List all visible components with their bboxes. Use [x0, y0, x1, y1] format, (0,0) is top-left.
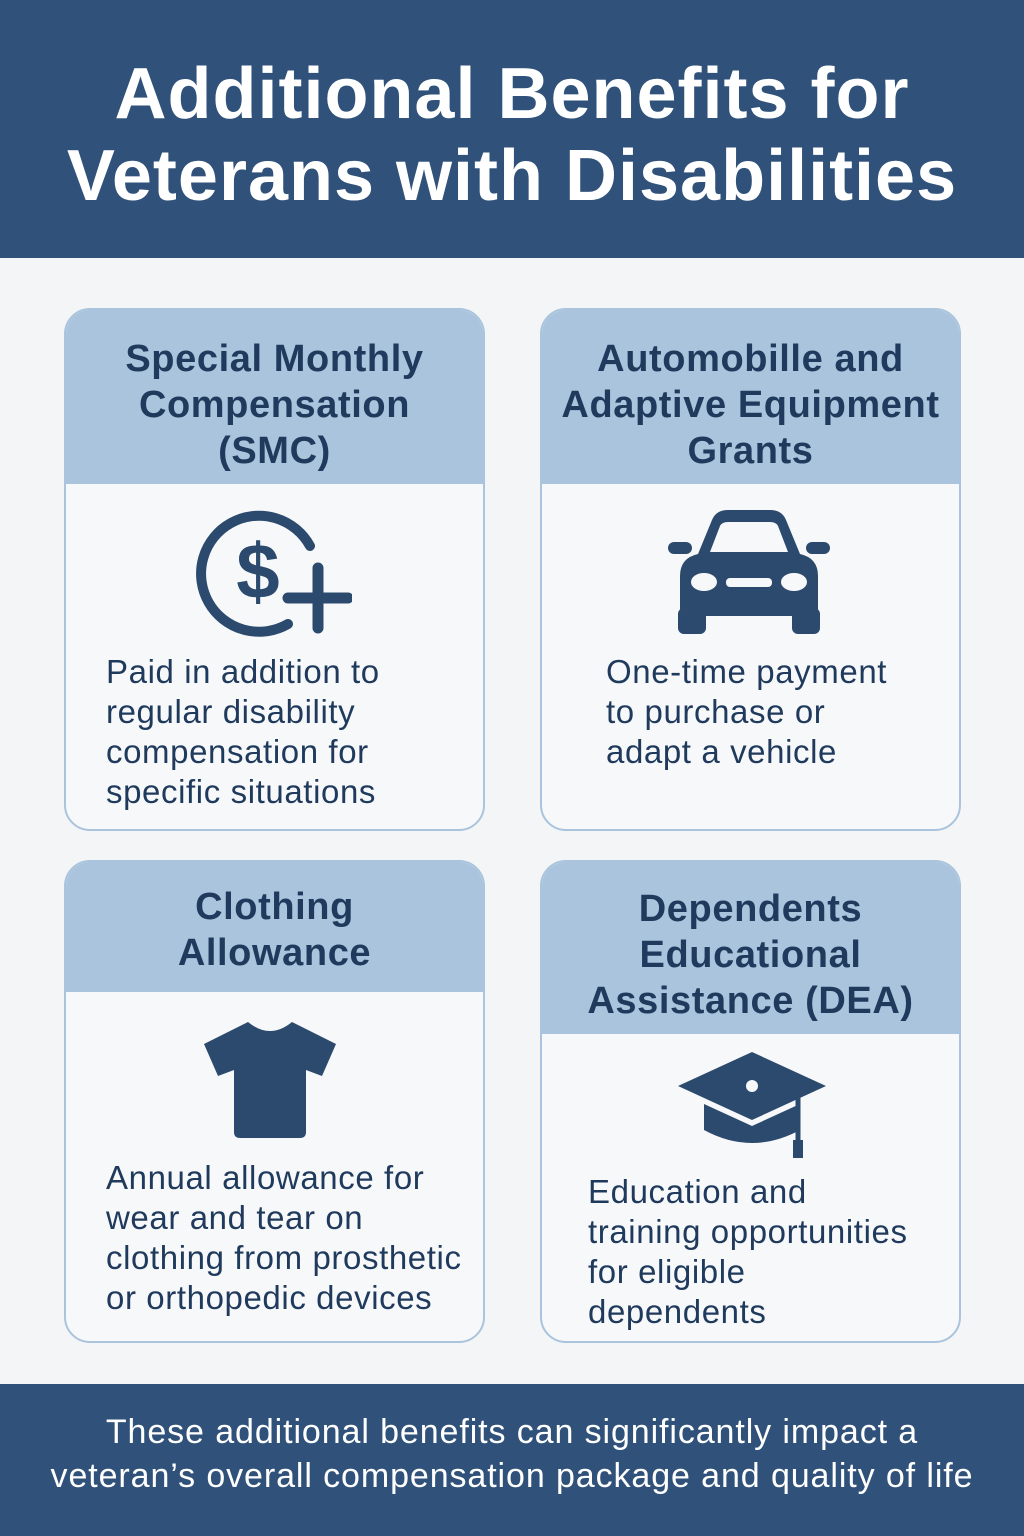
text: Automobile description: [606, 653, 887, 770]
heading: Automobile: [542, 310, 959, 484]
heading: DEA: Assistance (DEA): [587, 980, 914, 1022]
text: DEA description: Education and: [588, 1173, 807, 1210]
text: SMC description: specific situations: [106, 773, 376, 810]
heading: Automobile: Automobille and: [597, 338, 904, 380]
text: Clothing description: or orthopedic devices: [106, 1279, 432, 1316]
text: DEA description: [588, 1173, 908, 1330]
text: Clothing description: [106, 1159, 462, 1316]
text: Automobile description: One-time payment: [606, 653, 887, 690]
heading: DEA: [542, 862, 959, 1034]
heading: Clothing: [66, 862, 483, 992]
heading: SMC: (SMC): [218, 430, 331, 472]
panel: Clothing: [64, 860, 485, 1343]
heading: Automobile: Grants: [687, 430, 814, 472]
heading: SMC: Special Monthly: [125, 338, 424, 380]
text: SMC description: [106, 653, 380, 810]
text: Clothing description: wear and tear on: [106, 1199, 363, 1236]
footer text: [0, 1384, 1024, 1536]
text: Clothing description: Annual allowance for: [106, 1159, 424, 1196]
icon: graduation cap: [678, 1052, 826, 1158]
text: DEA description: training opportunities: [588, 1213, 908, 1250]
panel: DEA: [540, 860, 961, 1343]
text: DEA description: dependents: [588, 1293, 766, 1330]
heading: Automobile: Adaptive Equipment: [561, 384, 940, 426]
heading: Clothing: Allowance: [178, 932, 371, 974]
heading: DEA: Educational: [640, 934, 861, 976]
icon: dollar plus: $: [236, 527, 280, 615]
icon: dollar plus: [196, 510, 352, 637]
title: [0, 0, 1024, 258]
text: Automobile description: adapt a vehicle: [606, 733, 837, 770]
text: SMC description: compensation for: [106, 733, 369, 770]
text: Clothing description: clothing from prosthetic: [106, 1239, 462, 1276]
title: Additional Benefits for: [114, 54, 910, 134]
icon: car: [668, 510, 830, 634]
heading: SMC: [66, 310, 483, 484]
text: Automobile description: to purchase or: [606, 693, 825, 730]
text: DEA description: for eligible: [588, 1253, 746, 1290]
footer text: These additional benefits can significantly impact a: [106, 1413, 918, 1451]
heading: DEA: Dependents: [639, 888, 862, 930]
heading: Clothing: Clothing: [195, 886, 354, 928]
footer text: veteran’s overall compensation package and quality of life: [51, 1457, 973, 1495]
heading: SMC: Compensation: [139, 384, 410, 426]
title: Veterans with Disabilities: [67, 136, 957, 216]
icon: t-shirt: [204, 1022, 336, 1138]
panel: Automobile: [540, 308, 961, 831]
text: SMC description: regular disability: [106, 693, 355, 730]
panel: SMC: [64, 308, 485, 831]
text: SMC description: Paid in addition to: [106, 653, 380, 690]
